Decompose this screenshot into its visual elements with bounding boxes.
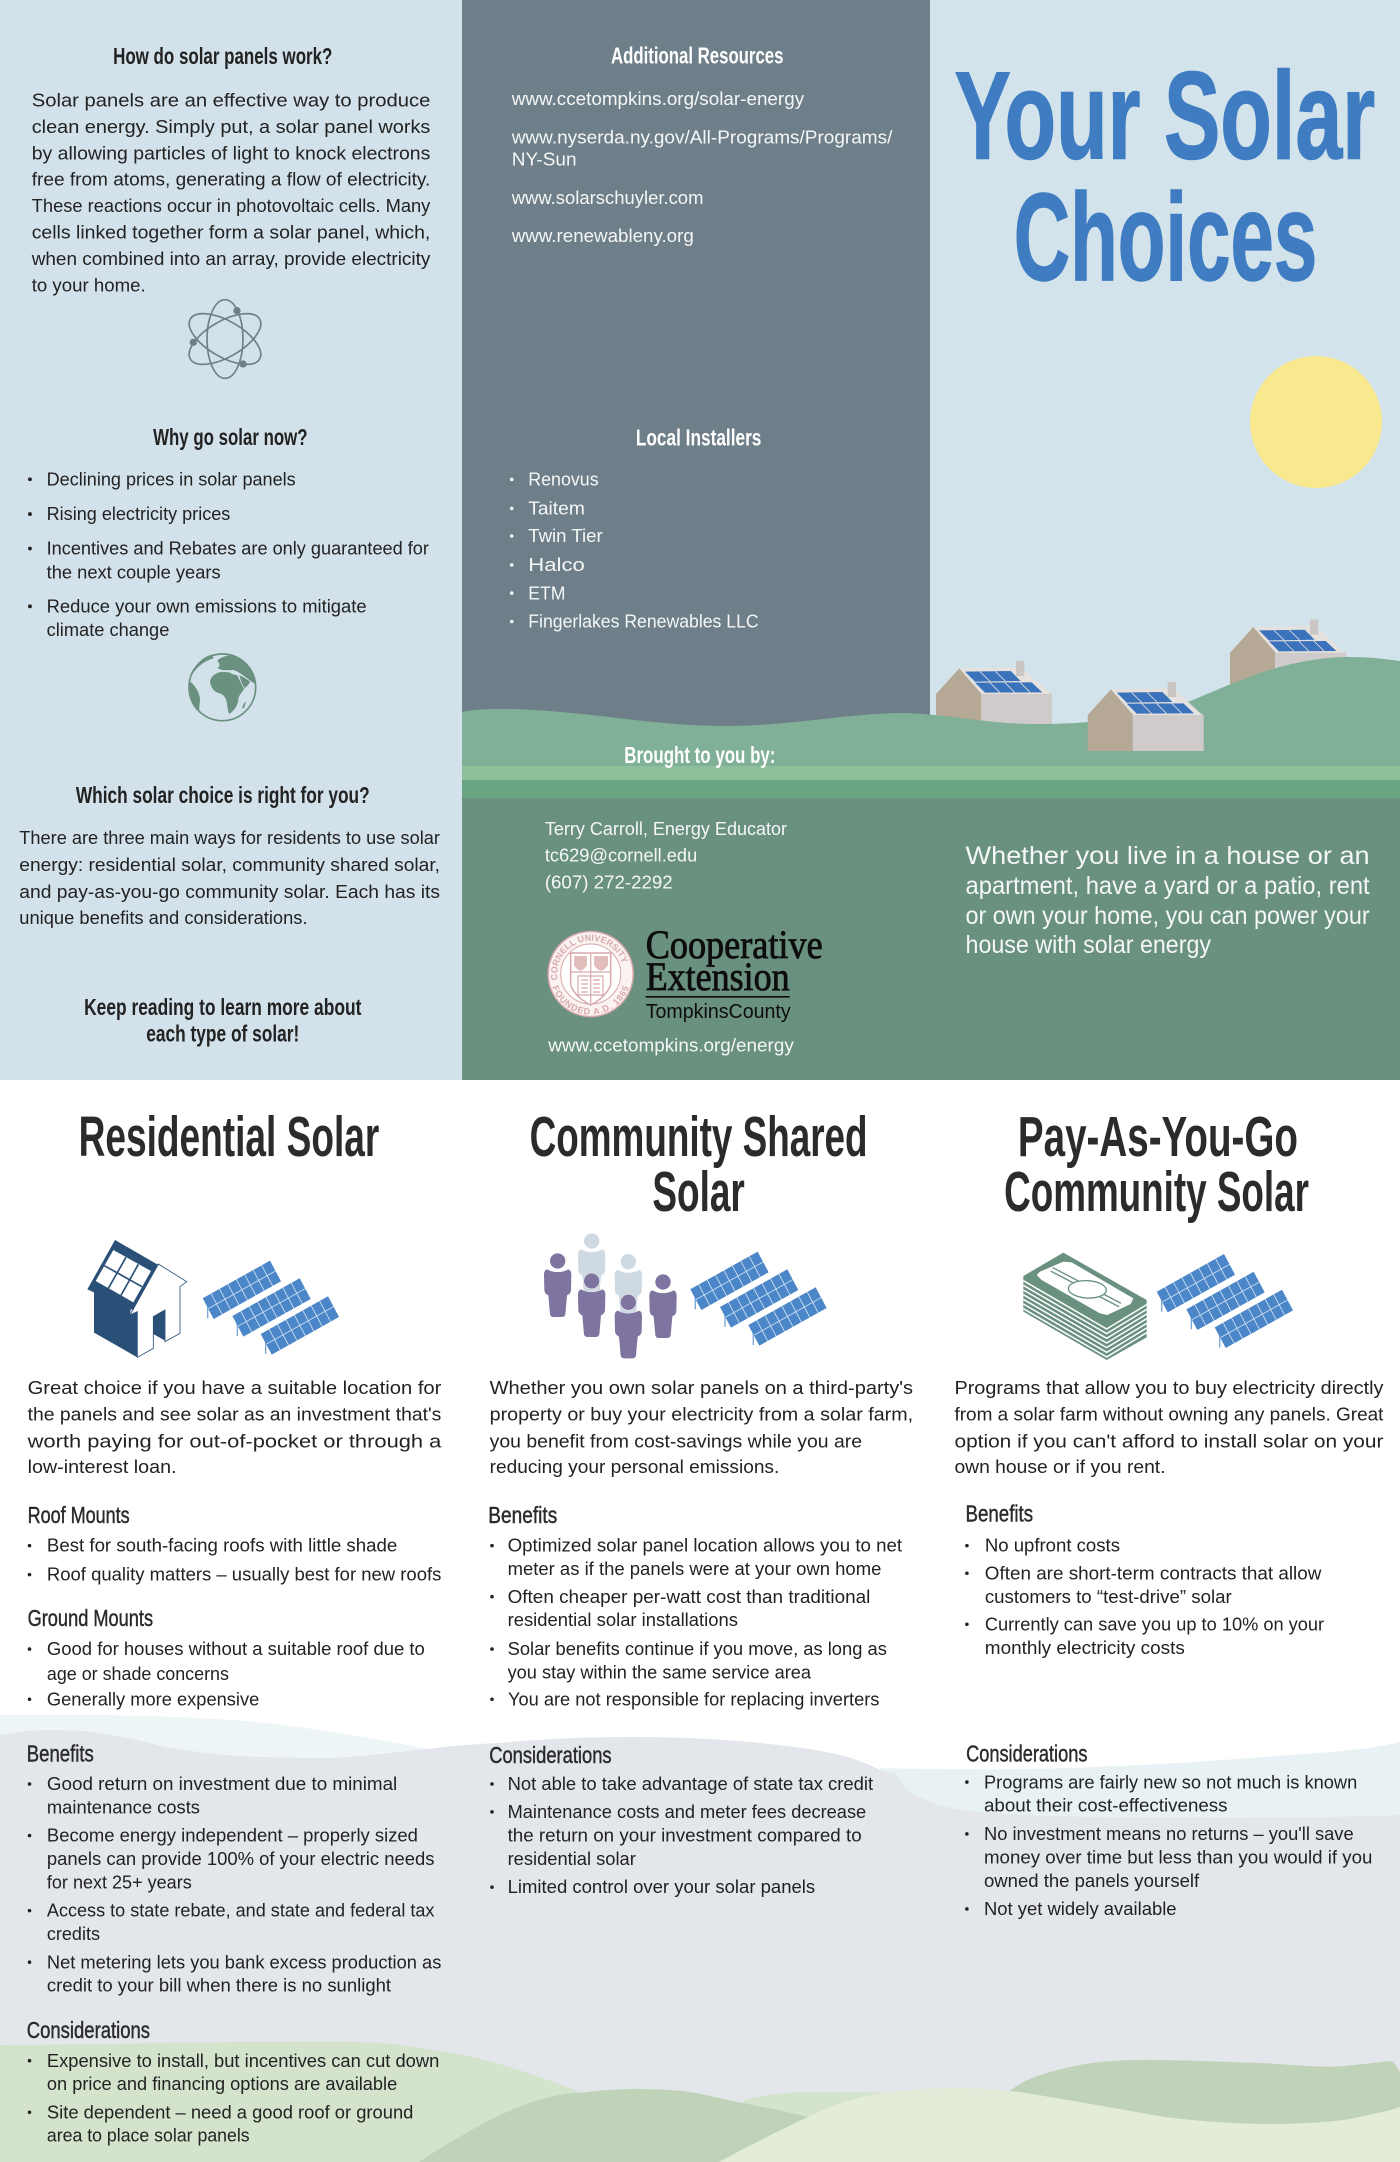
residential: roof mounts bbox=[28, 1502, 441, 1585]
community: benefits: Often cheaper per-watt cost than traditional bbox=[508, 1586, 870, 1607]
contact details: Terry Carroll, Energy Educator bbox=[545, 818, 787, 839]
panel: right sky background bbox=[930, 0, 1400, 770]
links: additional resources: www.renewableny.org bbox=[511, 225, 694, 246]
text block: solar choice: unique benefits and considerations. bbox=[19, 907, 308, 928]
icon: atom bbox=[181, 300, 269, 378]
pay-as-you-go: considerations: No investment means no returns – you'll save bbox=[984, 1823, 1354, 1844]
residential: benefits: Good return on investment due to minimal bbox=[47, 1773, 397, 1794]
residential: ground mounts bbox=[28, 1605, 425, 1710]
community: considerations: Considerations bbox=[489, 1742, 612, 1768]
community: benefits bbox=[488, 1502, 903, 1710]
callout: keep reading: each type of solar! bbox=[146, 1020, 299, 1046]
residential: considerations: on price and financing options are available bbox=[47, 2073, 397, 2094]
text block: solar choice: and pay-as-you-go community solar. Each has its bbox=[19, 881, 440, 902]
heading: Why go solar now?: Why go solar now? bbox=[153, 424, 308, 450]
heading: Community Shared Solar bbox=[530, 1105, 868, 1223]
community: considerations: residential solar bbox=[508, 1848, 636, 1869]
heading: Local Installers: Local Installers bbox=[636, 425, 761, 451]
residential: benefits: credit to your bill when there is no sunlight bbox=[47, 1975, 392, 1996]
residential: benefits: maintenance costs bbox=[47, 1796, 200, 1817]
panel: left column background bbox=[0, 0, 462, 1080]
icon: globe bbox=[189, 654, 256, 721]
community: benefits: Benefits bbox=[488, 1502, 557, 1528]
residential: ground mounts: age or shade concerns bbox=[47, 1663, 229, 1684]
text block: residential intro: low-interest loan. bbox=[28, 1456, 177, 1477]
pay-as-you-go: considerations: Considerations bbox=[966, 1740, 1087, 1766]
pay-as-you-go: benefits: monthly electricity costs bbox=[985, 1637, 1185, 1658]
text block: how solar panels work: clean energy. Simply put, a solar panel works bbox=[32, 116, 430, 137]
list: why go solar now: the next couple years bbox=[47, 561, 221, 582]
residential: benefits: Benefits bbox=[27, 1740, 94, 1766]
logo: Cooperative Extension: Cooperative bbox=[646, 922, 823, 967]
text block: how solar panels work: cells linked together form a solar panel, which, bbox=[32, 221, 430, 242]
title: Your Solar Choices bbox=[954, 48, 1375, 307]
text block: how solar panels work: when combined into an array, provide electricity bbox=[31, 248, 431, 269]
residential: benefits bbox=[27, 1740, 441, 1996]
community: considerations bbox=[489, 1742, 874, 1897]
residential: ground mounts: Ground Mounts bbox=[28, 1605, 153, 1631]
band: light green stripe bbox=[462, 766, 1400, 780]
logo: Cooperative Extension: TompkinsCounty bbox=[646, 1001, 791, 1023]
residential: roof mounts: Best for south-facing roofs with little shade bbox=[47, 1535, 397, 1556]
list: local installers: Halco bbox=[528, 554, 585, 575]
heading: Pay-As-You-Go Community Solar bbox=[1004, 1105, 1309, 1223]
list: local installers: Taitem bbox=[528, 497, 585, 518]
community: benefits: You are not responsible for replacing inverters bbox=[508, 1689, 879, 1710]
pay-as-you-go: benefits: customers to “test-drive” solar bbox=[985, 1586, 1232, 1607]
panel: bottom green footer bbox=[462, 798, 1400, 1080]
text block: how solar panels work: by allowing particles of light to knock electrons bbox=[32, 142, 430, 163]
links: additional resources bbox=[511, 88, 893, 246]
list: why go solar now bbox=[28, 468, 429, 640]
residential: roof mounts: Roof quality matters – usually best for new roofs bbox=[47, 1564, 441, 1585]
illustration: house in front of the hill bbox=[1088, 682, 1204, 751]
logo: Cooperative Extension: Extension bbox=[646, 954, 790, 999]
text block: residential intro: worth paying for out-of-pocket or through a bbox=[26, 1431, 442, 1452]
intro statement: or own your home, you can power your bbox=[966, 903, 1370, 930]
list: local installers bbox=[510, 469, 759, 632]
list: why go solar now: climate change bbox=[47, 619, 169, 640]
residential: benefits: panels can provide 100% of your electric needs bbox=[47, 1848, 434, 1869]
residential: considerations: area to place solar panels bbox=[47, 2125, 250, 2146]
band: mid green stripe bbox=[462, 780, 1400, 798]
residential: considerations: Considerations bbox=[27, 2017, 150, 2043]
community: benefits: meter as if the panels were at your own home bbox=[508, 1558, 881, 1579]
text block: residential intro bbox=[26, 1377, 442, 1477]
text block: community intro: Whether you own solar panels on a third-party's bbox=[490, 1377, 913, 1398]
residential: benefits: Become energy independent – properly sized bbox=[47, 1825, 418, 1846]
text block: pay-as-you-go intro: from a solar farm without owning any panels. Great bbox=[954, 1404, 1384, 1425]
callout: keep reading bbox=[84, 994, 362, 1046]
text block: how solar panels work: free from atoms, generating a flow of electricity. bbox=[32, 169, 430, 190]
logo: Cooperative Extension bbox=[646, 922, 823, 1023]
text block: community intro: property or buy your electricity from a solar farm, bbox=[490, 1404, 913, 1425]
text block: pay-as-you-go intro: Programs that allow you to buy electricity directly bbox=[954, 1377, 1384, 1398]
residential: roof mounts: Roof Mounts bbox=[28, 1502, 130, 1528]
icon: solar panels pay-as-you-go bbox=[1157, 1254, 1293, 1348]
residential: considerations: Site dependent – need a good roof or ground bbox=[47, 2101, 413, 2122]
text block: solar choice: energy: residential solar, community shared solar, bbox=[19, 854, 440, 875]
heading: Additional Resources: Additional Resources bbox=[611, 42, 783, 68]
links: additional resources: www.ccetompkins.org/solar-energy bbox=[511, 88, 805, 109]
text block: how solar panels work bbox=[31, 90, 431, 296]
logo: Cornell seal: CORNELL UNIVERSITY bbox=[551, 934, 628, 980]
heading: How do solar panels work?: How do solar panels work? bbox=[113, 43, 332, 69]
icon: group of people bbox=[544, 1233, 677, 1358]
residential: benefits: credits bbox=[47, 1923, 100, 1944]
residential: considerations: Expensive to install, but incentives can cut down bbox=[47, 2050, 439, 2071]
links: additional resources: NY-Sun bbox=[512, 149, 577, 170]
contact details: (607) 272-2292 bbox=[545, 871, 673, 892]
logo: Cornell seal: FOUNDED A.D. 1865 bbox=[552, 985, 628, 1015]
text block: community intro: you benefit from cost-savings while you are bbox=[490, 1431, 862, 1452]
text block: residential intro: Great choice if you have a suitable location for bbox=[28, 1377, 441, 1398]
list: why go solar now: Rising electricity prices bbox=[47, 503, 230, 524]
community: benefits: Optimized solar panel location allows you to net bbox=[508, 1535, 903, 1556]
bottom decorative waves bbox=[0, 1715, 1400, 2162]
text block: residential intro: the panels and see solar as an investment that's bbox=[28, 1404, 441, 1425]
heading: Community Shared Solar: Community Shared bbox=[530, 1105, 868, 1168]
logo: Cornell seal bbox=[547, 930, 634, 1018]
residential: considerations bbox=[27, 2017, 439, 2146]
residential: benefits: Net metering lets you bank excess production as bbox=[47, 1951, 441, 1972]
residential: ground mounts: Generally more expensive bbox=[47, 1689, 259, 1710]
contact details: tc629@cornell.edu bbox=[545, 845, 697, 866]
text block: pay-as-you-go intro bbox=[954, 1377, 1384, 1477]
illustration: green hill bbox=[462, 657, 1400, 770]
pay-as-you-go: benefits: Currently can save you up to 10% on your bbox=[985, 1613, 1324, 1634]
list: why go solar now: Incentives and Rebates are only guaranteed for bbox=[47, 538, 429, 559]
intro statement bbox=[966, 843, 1370, 959]
residential: benefits: for next 25+ years bbox=[47, 1871, 192, 1892]
list: local installers: Twin Tier bbox=[528, 525, 603, 546]
intro statement: house with solar energy bbox=[966, 932, 1212, 959]
list: why go solar now: Declining prices in solar panels bbox=[47, 468, 296, 489]
community: considerations: the return on your investment compared to bbox=[508, 1825, 862, 1846]
callout: keep reading: Keep reading to learn more about bbox=[84, 994, 362, 1020]
text block: how solar panels work: Solar panels are an effective way to produce bbox=[32, 90, 430, 111]
list: why go solar now: Reduce your own emissions to mitigate bbox=[47, 595, 367, 616]
pay-as-you-go: benefits bbox=[965, 1500, 1324, 1658]
pay-as-you-go: considerations: Programs are fairly new so not much is known bbox=[984, 1771, 1357, 1792]
text block: pay-as-you-go intro: own house or if you rent. bbox=[954, 1456, 1166, 1477]
icon: sun bbox=[1250, 356, 1382, 488]
text block: solar choice bbox=[19, 827, 440, 928]
pay-as-you-go: considerations bbox=[965, 1740, 1372, 1919]
heading: Brought to you by: Brought to you by: bbox=[624, 742, 775, 768]
community: benefits: Solar benefits continue if you move, as long as bbox=[508, 1638, 887, 1659]
pay-as-you-go: benefits: No upfront costs bbox=[985, 1535, 1120, 1556]
list: local installers: Renovus bbox=[528, 469, 599, 490]
text block: community intro: reducing your personal emissions. bbox=[490, 1456, 779, 1477]
community: benefits: you stay within the same service area bbox=[508, 1662, 812, 1683]
heading: Residential Solar: Residential Solar bbox=[79, 1105, 379, 1168]
text block: community intro bbox=[490, 1377, 913, 1477]
community: considerations: Not able to take advantage of state tax credit bbox=[508, 1773, 874, 1794]
text block: how solar panels work: These reactions occur in photovoltaic cells. Many bbox=[32, 195, 431, 216]
heading: Community Shared Solar: Solar bbox=[652, 1160, 745, 1223]
pay-as-you-go: benefits: Often are short-term contracts that allow bbox=[985, 1562, 1322, 1583]
pay-as-you-go: considerations: owned the panels yourself bbox=[984, 1870, 1200, 1891]
residential: ground mounts: Good for houses without a suitable roof due to bbox=[47, 1638, 425, 1659]
community: benefits: residential solar installations bbox=[508, 1609, 738, 1630]
intro statement: Whether you live in a house or an bbox=[966, 843, 1370, 870]
links: additional resources: www.solarschuyler.com bbox=[511, 187, 703, 208]
text block: solar choice: There are three main ways for residents to use solar bbox=[19, 827, 440, 848]
illustration: houses behind the hill bbox=[936, 620, 1346, 730]
pay-as-you-go: considerations: money over time but less than you would if you bbox=[984, 1846, 1372, 1867]
icon: stack of money bbox=[1023, 1253, 1147, 1360]
community: considerations: Limited control over your solar panels bbox=[508, 1876, 815, 1897]
link: ccetompkins energy: www.ccetompkins.org/energy bbox=[547, 1035, 794, 1056]
list: local installers: ETM bbox=[528, 582, 566, 603]
pay-as-you-go: benefits: Benefits bbox=[966, 1500, 1033, 1526]
links: additional resources: www.nyserda.ny.gov/All-Programs/Programs/ bbox=[511, 126, 893, 147]
panel: middle column background bbox=[462, 0, 930, 770]
contact details bbox=[545, 818, 787, 892]
pay-as-you-go: considerations: Not yet widely available bbox=[984, 1898, 1177, 1919]
community: considerations: Maintenance costs and meter fees decrease bbox=[508, 1801, 866, 1822]
icon: solar panels community bbox=[690, 1252, 827, 1346]
icon: solar panels residential bbox=[203, 1261, 339, 1355]
list: local installers: Fingerlakes Renewables LLC bbox=[528, 611, 759, 632]
intro statement: apartment, have a yard or a patio, rent bbox=[966, 873, 1370, 900]
residential: benefits: Access to state rebate, and state and federal tax bbox=[47, 1900, 435, 1921]
icon: residential house bbox=[87, 1240, 187, 1357]
text block: how solar panels work: to your home. bbox=[32, 275, 146, 296]
heading: Which solar choice is right for you?: Which solar choice is right for you? bbox=[76, 782, 370, 808]
pay-as-you-go: considerations: about their cost-effectiveness bbox=[984, 1795, 1228, 1816]
text block: pay-as-you-go intro: option if you can't afford to install solar on your bbox=[954, 1431, 1383, 1452]
